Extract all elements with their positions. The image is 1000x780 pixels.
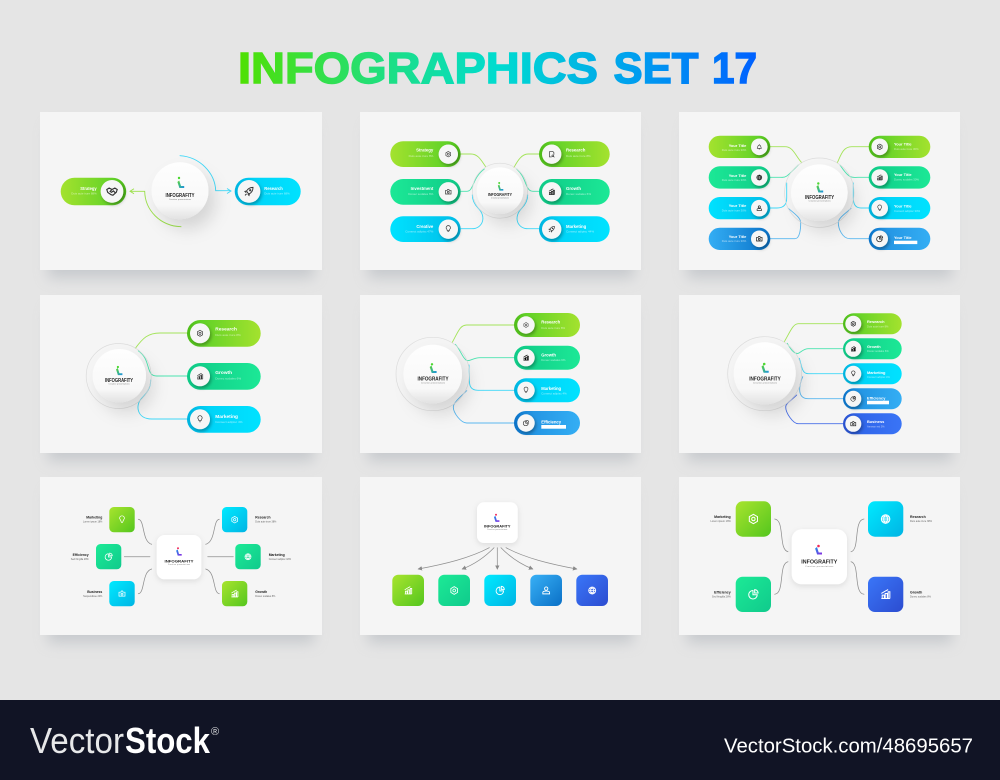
item: Marketing right <box>235 544 292 569</box>
item: Efficiency <box>71 544 121 569</box>
central sphere: INFOGRAFITY <box>105 378 134 384</box>
right pill 2: Donec sodales 30% <box>894 177 919 181</box>
central sphere: Creative presentations <box>108 382 130 385</box>
left pill 3 <box>709 197 770 219</box>
item: Efficiency: Sed fringilla 28% <box>712 596 731 598</box>
central card: Creative presentations <box>805 565 833 568</box>
square: gear <box>438 575 470 606</box>
item: Marketing: Lorem ipsum 18% <box>711 520 731 523</box>
pill: Marketing: Consect adipisc 4% <box>867 375 890 379</box>
item: Growth <box>868 577 932 612</box>
pill: Growth: Growth <box>566 186 581 191</box>
pill: Efficiency <box>843 388 902 409</box>
pill: Strategy <box>61 178 126 205</box>
left pill 4: Your Title <box>729 234 747 239</box>
item: Research <box>868 501 933 537</box>
connectors <box>135 333 187 419</box>
pill: Creative <box>390 216 461 242</box>
logo wordmark: Stock <box>125 720 211 761</box>
pill: Strategy: Duis aute irure 88% <box>71 192 97 196</box>
image id: VectorStock.com/48695657 <box>724 736 973 758</box>
pill: Research: Research <box>264 186 283 191</box>
right pill 1: Your Title <box>894 142 912 146</box>
central card: Creative presentations <box>168 563 190 566</box>
pill: Growth: Growth <box>541 352 556 358</box>
central sphere: INFOGRAFITY <box>418 376 449 382</box>
pill: Growth: Donec sodales 6% <box>215 376 241 380</box>
central sphere <box>396 337 469 411</box>
title: SET <box>614 44 699 93</box>
item: Efficiency: Efficiency <box>714 590 731 594</box>
logo wordmark <box>30 720 219 761</box>
pill: Growth <box>539 179 610 205</box>
item: Marketing: Lorem ipsum 18% <box>83 520 103 524</box>
item: Research: Duis aute irure 38% <box>910 520 933 523</box>
central sphere: Creative presentations <box>421 382 445 384</box>
item: Marketing right: Marketing <box>269 553 285 557</box>
right pill 3 <box>869 197 930 219</box>
central sphere <box>472 163 528 218</box>
connectors <box>770 147 869 239</box>
pill: Business <box>843 413 902 434</box>
item: Marketing: Marketing <box>714 515 731 519</box>
central sphere: INFOGRAFITY <box>488 192 512 197</box>
central sphere <box>86 344 151 408</box>
right pill 3: Your Title <box>894 204 912 208</box>
pill: Marketing: Consect adipisc 44% <box>566 230 594 234</box>
pill: Strategy: Strategy <box>416 148 434 152</box>
item: Growth: Donec sodales 8% <box>255 595 276 598</box>
central card: INFOGRAFITY <box>484 524 511 528</box>
panel: six squares <box>40 477 322 643</box>
pill: Business: Business <box>867 419 884 424</box>
item: Business <box>83 581 135 606</box>
item: Research: Research <box>255 516 271 520</box>
pill: Research: Research <box>566 148 586 152</box>
right pill 4: Your Title <box>894 235 912 240</box>
pill: Research: Duis aute irure 68% <box>264 192 290 196</box>
logo wordmark: Vector <box>30 720 124 761</box>
item: Research <box>222 507 277 532</box>
pill: Research: Duis aute irure 8% <box>215 333 241 337</box>
item: Marketing: Marketing <box>86 516 102 520</box>
central card: INFOGRAFITY <box>164 560 194 564</box>
connectors <box>124 519 233 594</box>
central card <box>477 502 518 543</box>
title: 17 <box>712 44 757 93</box>
item: Marketing <box>711 501 771 537</box>
pill: Efficiency: Efficiency <box>867 396 886 400</box>
left pill 2: Your Title <box>729 173 747 178</box>
connectors <box>461 154 539 229</box>
item: Marketing right: Consect adipisc 18% <box>269 558 292 561</box>
pill: Research <box>514 313 580 337</box>
item: Marketing <box>83 507 135 532</box>
pill: Investment: Donec sodales 6% <box>408 192 434 196</box>
connectors <box>775 519 864 594</box>
item: Growth: Growth <box>910 590 922 594</box>
pill: Marketing: Marketing <box>867 370 886 375</box>
connectors <box>452 325 514 423</box>
square: person <box>530 575 562 606</box>
pill: Growth: Donec sodales 6% <box>867 349 889 353</box>
square: pie <box>484 575 516 606</box>
central sphere: INFOGRAFITY <box>749 376 781 382</box>
central sphere: Creative presentations <box>491 196 509 200</box>
central sphere: Creative presentations <box>809 200 831 203</box>
central card <box>792 529 847 584</box>
pill: Marketing <box>514 378 580 402</box>
panel: four pills right <box>360 295 641 461</box>
pill: Creative: Creative <box>416 224 434 229</box>
central sphere: Creative presentations <box>169 198 191 201</box>
central sphere: Creative presentations <box>753 382 777 384</box>
left pill 1 <box>709 136 770 158</box>
connectors <box>784 324 843 424</box>
item: Growth <box>222 581 276 606</box>
pill: Marketing <box>187 406 261 433</box>
pill: Marketing: Marketing <box>215 414 238 420</box>
item: Research: Duis aute irure 38% <box>255 520 277 524</box>
pill: Strategy <box>390 141 461 167</box>
right pill 2: Your Title <box>894 172 912 177</box>
item: Efficiency <box>712 577 771 612</box>
left pill 4: Duis aute irure 30% <box>722 239 747 243</box>
pill: Efficiency <box>514 411 580 435</box>
left pill 4 <box>709 228 770 250</box>
panel: four squares <box>679 477 960 643</box>
pill: Growth: Growth <box>215 370 232 376</box>
central sphere <box>152 162 208 219</box>
left pill 1: Duis aute irure 30% <box>722 148 747 152</box>
central sphere <box>785 158 854 227</box>
panel: six pills <box>360 112 641 278</box>
pill: Growth: Donec sodales 6% <box>566 192 591 196</box>
right pill 1 <box>869 136 930 158</box>
left pill 3: Duis aute irure 30% <box>722 209 747 213</box>
pill: Growth <box>514 346 580 370</box>
left pill 2: Duis aute irure 30% <box>722 178 747 182</box>
pill: Research <box>539 141 610 167</box>
pill: Research: Research <box>215 326 237 332</box>
item: Efficiency: Efficiency <box>73 553 89 557</box>
pill: Growth <box>187 363 261 390</box>
pill: Research <box>187 320 261 347</box>
pill: Marketing <box>843 363 902 384</box>
right pill 4 <box>869 228 930 250</box>
right pill 3: Consect adipisc 30% <box>894 209 921 213</box>
pill: Research <box>843 313 902 334</box>
central card: Creative presentations <box>487 528 508 531</box>
left pill 2 <box>709 166 770 189</box>
pill: Research: Research <box>867 319 885 324</box>
left pill 3: Your Title <box>729 203 747 208</box>
logo wordmark: ® <box>211 726 219 738</box>
pill: Strategy: Duis aute irure 8% <box>409 154 434 158</box>
pill: Research: Research <box>541 320 561 324</box>
pill: Investment <box>390 179 461 205</box>
pill: Marketing: Marketing <box>566 224 587 229</box>
item: Business: Business <box>87 590 102 594</box>
item: Research: Research <box>910 515 926 519</box>
square: chart <box>392 575 424 606</box>
item: Growth: Growth <box>255 590 267 594</box>
pill: Research <box>235 178 301 205</box>
right pill 1: Duis aute irure 30% <box>894 147 919 151</box>
item: Efficiency: Sed fringilla 28% <box>71 558 90 561</box>
central sphere: INFOGRAFITY <box>805 195 835 201</box>
pill: Strategy: Strategy <box>80 186 97 191</box>
pill: Marketing <box>539 216 610 242</box>
pill: Research: Duis aute irure 8% <box>541 326 566 330</box>
square: globe <box>576 575 608 606</box>
panel: eight pills <box>679 112 960 278</box>
item: Growth: Donec sodales 8% <box>910 596 932 598</box>
central sphere <box>728 337 802 411</box>
panel: three pills right <box>40 295 322 461</box>
title: INFOGRAPHICS <box>238 44 598 93</box>
left pill 1: Your Title <box>729 143 747 148</box>
panel: one-to-two pills <box>40 112 322 278</box>
pill: Marketing: Consect adipisc 4% <box>541 392 567 396</box>
central sphere: INFOGRAFITY <box>166 193 195 199</box>
pill: Marketing: Consect adipisc 4% <box>215 420 243 424</box>
panel: tree of five squares <box>360 477 641 643</box>
pill: Research: Duis aute irure 8% <box>867 324 889 328</box>
pill: Research: Duis aute irure 8% <box>566 154 591 158</box>
connector arcs <box>130 156 231 227</box>
pill: Growth: Growth <box>867 344 881 349</box>
footer bar <box>0 700 1000 780</box>
pill: Growth: Donec sodales 6% <box>541 358 566 362</box>
arrows <box>418 548 577 569</box>
panel: five pills right <box>679 295 960 461</box>
central card: INFOGRAFITY <box>801 560 838 566</box>
pill: Efficiency: Efficiency <box>541 420 562 424</box>
pill: Marketing: Marketing <box>541 386 562 391</box>
pill: Investment: Investment <box>411 186 434 191</box>
title <box>238 44 757 93</box>
right pill 2 <box>869 166 930 189</box>
pill: Creative: Consect adipisc 47% <box>405 230 434 234</box>
pill: Business: Aenean est 5% <box>867 424 885 428</box>
pill: Growth <box>843 338 902 359</box>
item: Business: Suspendisse 24% <box>83 595 103 598</box>
central card <box>157 535 201 579</box>
